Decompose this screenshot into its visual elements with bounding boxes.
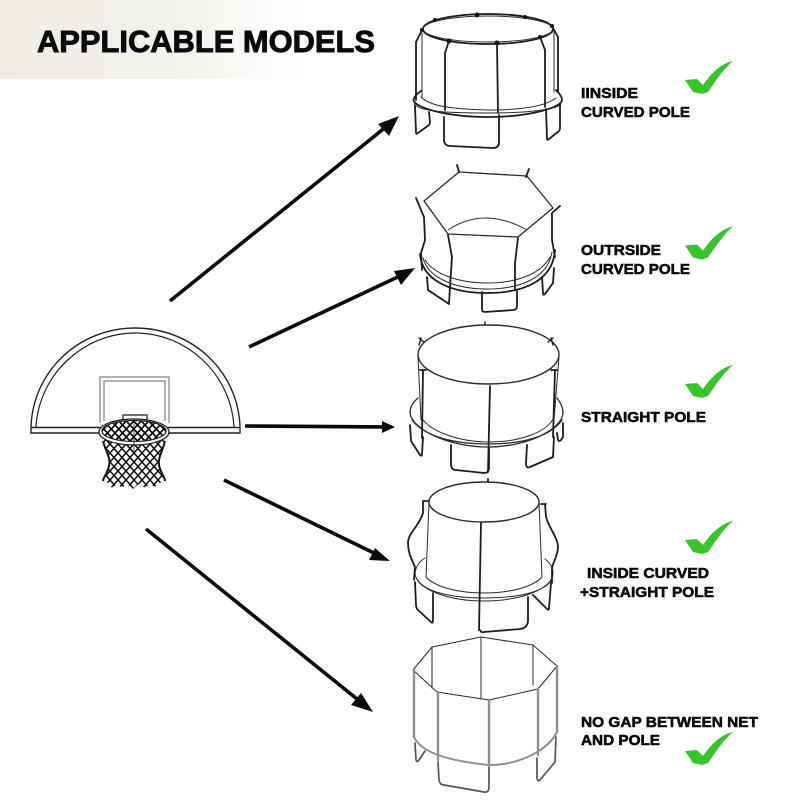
- trampoline: no gap between net and pole: [413, 637, 557, 792]
- label: inside curved pole: IINSIDE: [581, 86, 638, 102]
- arrow to straight pole: [245, 421, 395, 433]
- arrow to outside curved pole: [249, 268, 415, 347]
- icon: green check 2: [685, 226, 733, 260]
- label: outside curved pole: OUTRSIDE: [581, 243, 661, 259]
- arrow to no gap model: [146, 529, 373, 712]
- trampoline: outside curved pole: [416, 165, 560, 312]
- label: inside curved pole: [581, 86, 690, 121]
- icon: green check 5: [685, 732, 733, 765]
- hoop rim: [99, 415, 169, 452]
- label: inside curved plus straight pole: +STRAIGHT POLE: [580, 585, 714, 601]
- label: no gap between net and pole: NO GAP BETWEEN NET: [581, 715, 758, 731]
- label: inside curved plus straight pole: INSIDE CURVED: [587, 566, 709, 582]
- label: inside curved pole: CURVED POLE: [581, 105, 690, 121]
- label: straight pole: STRAIGHT POLE: [581, 410, 706, 426]
- trampoline: inside curved pole: [414, 12, 562, 148]
- hoop net: [100, 440, 168, 490]
- icon: green check 1: [685, 61, 733, 94]
- label: outside curved pole: CURVED POLE: [581, 262, 690, 278]
- icon: green check 4: [685, 521, 733, 554]
- label: no gap between net and pole: AND POLE: [581, 733, 660, 749]
- icon: green check 3: [685, 365, 733, 398]
- header background band: [0, 0, 310, 79]
- arrow to inside curved pole: [170, 116, 399, 301]
- label: inside curved plus straight pole: [580, 566, 714, 601]
- icon: basketball backboard and hoop: [31, 328, 240, 490]
- label: outside curved pole: [581, 243, 690, 278]
- arrow to inside curved plus straight pole: [224, 480, 390, 561]
- backboard: [31, 328, 240, 433]
- trampoline: inside curved plus straight pole: [408, 479, 558, 632]
- trampoline: straight pole: [410, 322, 563, 473]
- label: no gap between net and pole: [581, 715, 758, 749]
- title: APPLICABLE MODELS: [37, 24, 375, 59]
